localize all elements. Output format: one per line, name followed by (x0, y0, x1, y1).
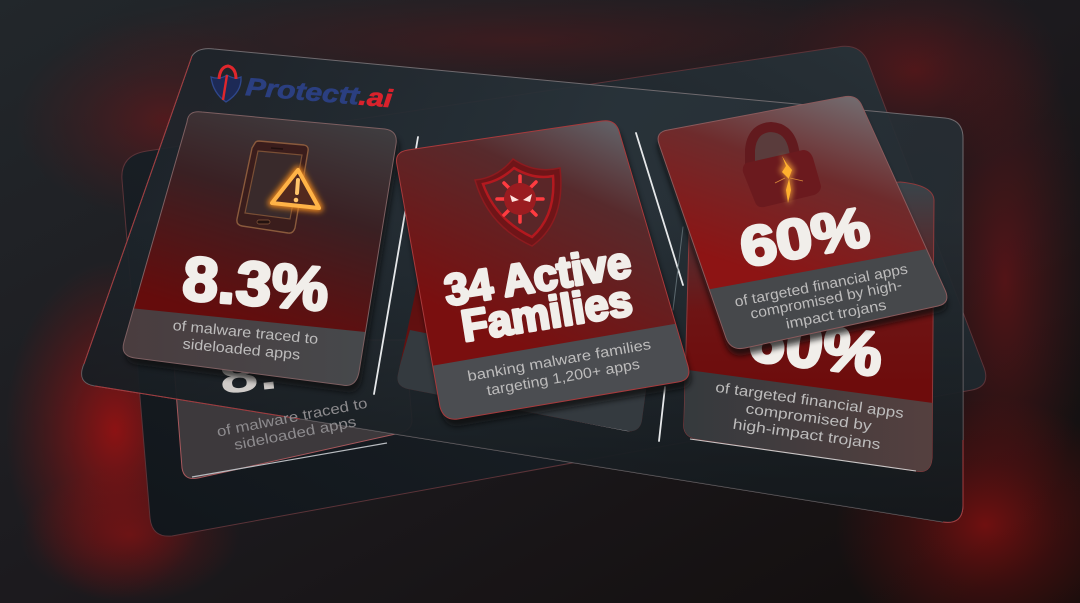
rear board (122, 46, 986, 536)
card 1: sideloaded malware (110, 112, 399, 400)
caption: card 3: compromised by high- (749, 277, 904, 323)
stat: 34 Active Families (441, 238, 636, 351)
rear card: financial apps ghost: 60% (745, 305, 886, 390)
ghost stat text left: sideloaded apps (233, 414, 358, 454)
main board red rim (84, 56, 963, 522)
card 2: active families (396, 121, 700, 430)
card 3: financial apps (658, 96, 960, 360)
caption: card 3: of targeted financial apps (733, 261, 909, 311)
caption: card 2: banking malware families (466, 337, 652, 385)
ghost stat text left: of malware traced to (216, 396, 369, 441)
rear card: banking families ghost (398, 285, 646, 432)
rear card: financial apps ghost: compromised by (745, 401, 873, 435)
icon: cracked padlock (743, 127, 821, 207)
stat: 8.3%: 8.3% (180, 244, 331, 325)
caption: card 1: of malware traced to (172, 318, 319, 348)
logo: Protectt.ai (211, 66, 395, 113)
caption: card 1 (172, 318, 319, 364)
separator lines (374, 133, 683, 441)
stat: 34 Active Families: 34 Active (441, 238, 634, 316)
stat: 34 Active Families: Families (458, 276, 636, 351)
rear card: malware ghost (172, 340, 412, 479)
icon: shield with virus (475, 159, 561, 246)
rear card: financial apps ghost (670, 182, 940, 480)
icon: phone with warning (237, 141, 319, 233)
ghost stat text left (216, 346, 369, 454)
main board (82, 49, 963, 522)
rear card: financial apps ghost: high-impact trojans (732, 417, 881, 453)
icon: logo shield (211, 66, 241, 102)
rear card: financial apps ghost: of targeted financial apps (714, 380, 905, 422)
caption: card 2 (466, 337, 652, 399)
caption: card 1: sideloaded apps (182, 336, 301, 364)
caption: card 3: impact trojans (785, 297, 888, 333)
caption: card 2: targeting 1,200+ apps (486, 357, 641, 399)
ghost stat text left: 8. (217, 346, 280, 404)
stat: 60%: 60% (735, 194, 874, 279)
caption: card 3 (733, 261, 909, 333)
wordmark: Protectt .ai (244, 73, 395, 113)
